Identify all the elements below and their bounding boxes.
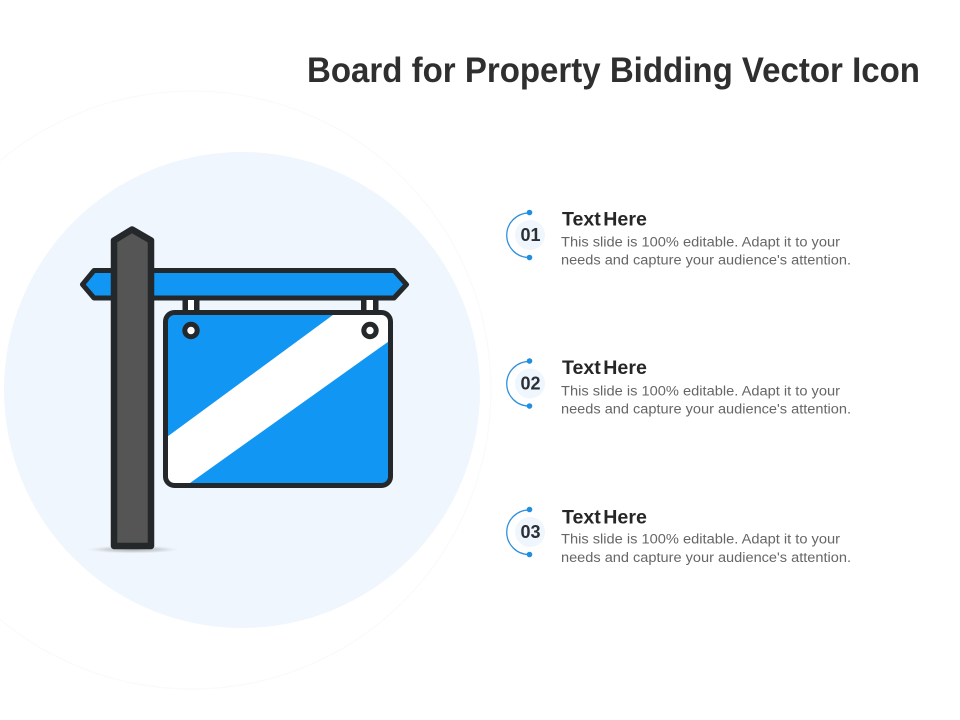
- background circle: [4, 152, 480, 628]
- body 02: needs and capture your audience's attention.: [561, 402, 851, 418]
- board hole right: [364, 324, 376, 337]
- number badge 02: [507, 358, 545, 409]
- body 03: This slide is 100% editable. Adapt it to your: [561, 532, 840, 548]
- body 01: needs and capture your audience's attention.: [561, 252, 851, 268]
- icon: property sign board: [82, 230, 406, 554]
- hanging board: [160, 312, 392, 488]
- heading 03: Text Here: [562, 506, 647, 528]
- body 02: This slide is 100% editable. Adapt it to your: [561, 384, 840, 400]
- body 03: needs and capture your audience's attention.: [561, 550, 851, 566]
- infographic canvas: [4, 56, 918, 628]
- board hole left: [185, 324, 197, 337]
- post shadow: [86, 546, 180, 554]
- heading 02: Text Here: [562, 357, 647, 379]
- outer faint circle: [0, 91, 491, 689]
- number badge 01: 01: [520, 225, 541, 245]
- body 01: This slide is 100% editable. Adapt it to your: [561, 234, 840, 250]
- hangers: [182, 299, 378, 312]
- post: [114, 230, 151, 546]
- heading 01: Text Here: [562, 208, 647, 230]
- item 02: [507, 357, 851, 418]
- number badge 02: 02: [520, 374, 541, 394]
- number badge 01: [507, 210, 545, 260]
- number badge 03: 03: [520, 522, 541, 542]
- item 01: [507, 208, 851, 268]
- title: Board for Property Bidding Vector Icon: [307, 51, 920, 90]
- crossbar: [82, 270, 406, 298]
- number badge 03: [507, 507, 545, 557]
- item 03: [507, 506, 851, 566]
